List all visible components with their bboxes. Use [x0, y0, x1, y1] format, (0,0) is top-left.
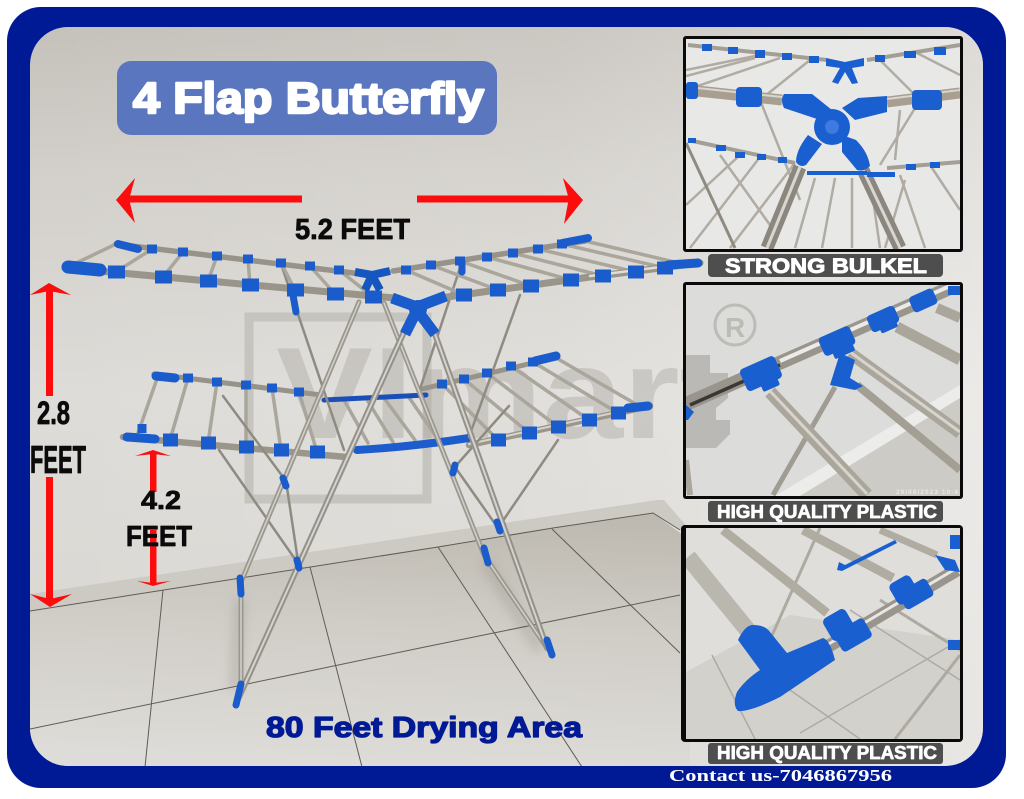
arrow: height lower — [135, 450, 171, 586]
lower rack rods — [123, 357, 650, 457]
label: height 4.2 feet — [126, 485, 192, 553]
label: height 2.8 feet: FEET — [30, 439, 86, 482]
label: high quality plastic middle: HIGH QUALITY PLASTIC — [717, 502, 937, 522]
rods of the panel — [686, 286, 960, 495]
arrow head left — [116, 178, 135, 223]
floor with tiles — [30, 500, 690, 767]
panel: end cap detail — [681, 525, 963, 742]
label: height 2.8 feet: 2.8 — [37, 395, 70, 431]
title badge — [117, 61, 497, 135]
arrow head right — [563, 178, 583, 224]
date stamp: 29/08/2023 10:4 — [896, 489, 958, 496]
label: strong bulkel: STRONG BULKEL — [725, 255, 927, 278]
label: high quality plastic bottom: HIGH QUALITY PLASTIC — [717, 743, 937, 763]
blue plastic parts — [735, 535, 960, 711]
label: height 4.2 feet: FEET — [126, 521, 192, 553]
title badge: 4 Flap Butterfly — [133, 74, 485, 123]
front legs — [239, 332, 547, 697]
panel: plastic clamps detail — [683, 282, 963, 499]
arrow: width right — [417, 196, 570, 202]
watermark logo — [249, 317, 728, 499]
label: width 5.2 feet: 5.2 FEET — [295, 214, 410, 246]
front hub connector — [392, 296, 446, 334]
drying rack — [65, 238, 700, 705]
registered watermark in detail — [715, 305, 755, 345]
rear legs — [241, 302, 547, 693]
contact line: Contact us-7046867956 — [669, 766, 892, 785]
rear upper hub — [355, 271, 390, 290]
arrow: height overall — [30, 283, 72, 607]
blue fittings — [686, 44, 946, 177]
thin brace rods — [219, 264, 558, 568]
caption: drying area: 80 Feet Drying Area — [266, 712, 583, 744]
blue clamps — [686, 286, 960, 420]
watermark logo: VImart — [276, 320, 728, 466]
label: height 2.8 feet — [30, 395, 86, 482]
rods of the panel — [688, 528, 960, 739]
upper rack rods — [65, 241, 700, 298]
blue clamps — [68, 238, 698, 705]
rods of the detail — [686, 45, 960, 248]
label: height 4.2 feet: 4.2 — [141, 485, 181, 515]
grey logo fragment — [686, 355, 730, 448]
registered watermark in detail: R — [725, 312, 745, 343]
panel: strong buckle detail — [683, 36, 963, 252]
arrow: width left — [128, 196, 302, 202]
